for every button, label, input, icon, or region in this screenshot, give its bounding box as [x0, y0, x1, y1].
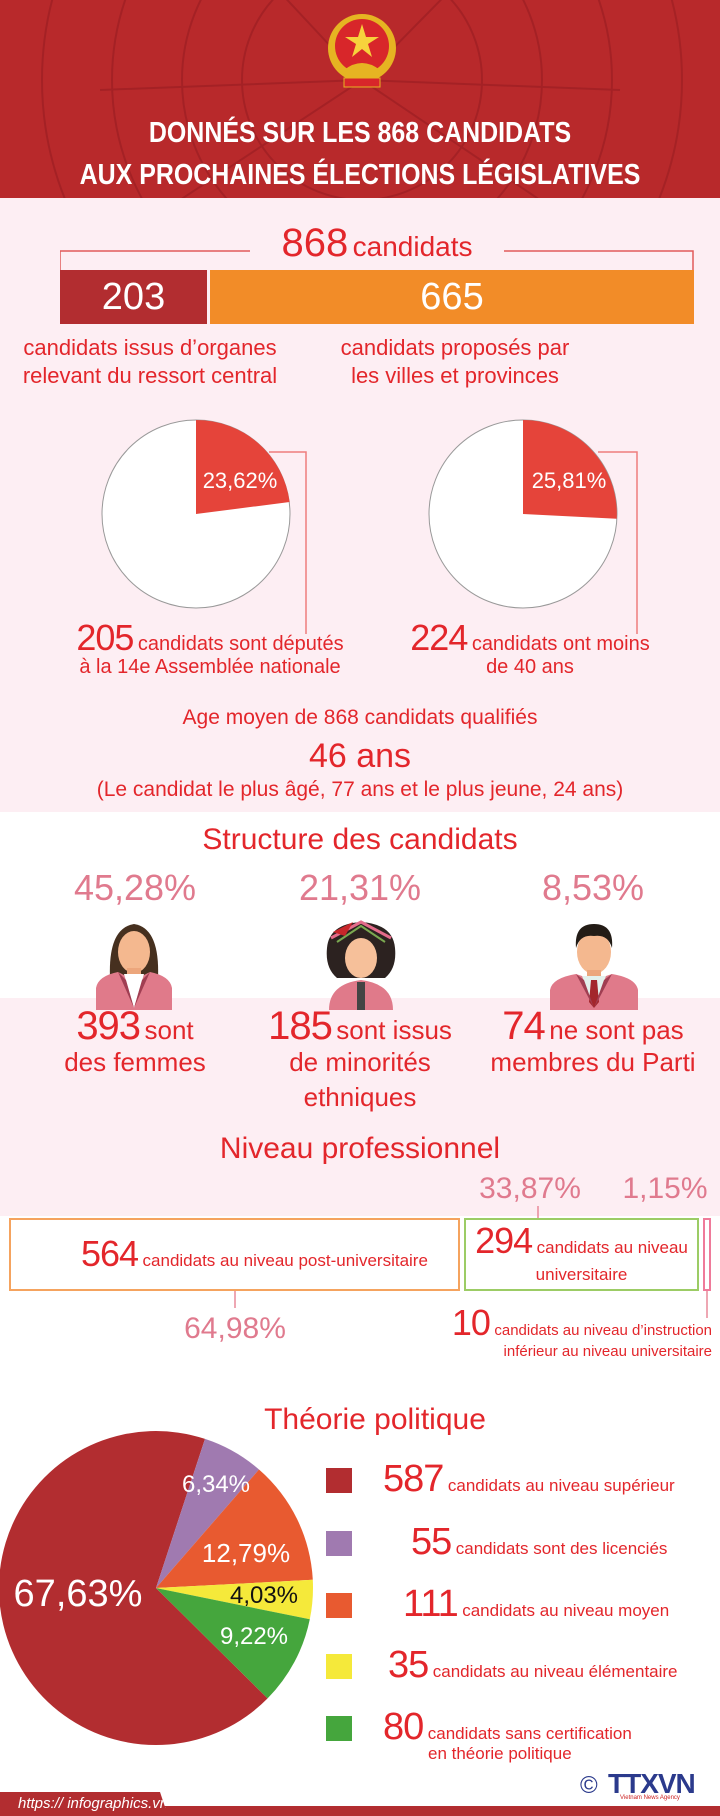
box: university: universitaire	[536, 1265, 627, 1284]
chart: pie deputies	[102, 420, 638, 634]
text: 185 minorities	[268, 1004, 452, 1112]
text: 205 deputies: à la 14e Assemblée nationale	[79, 656, 341, 678]
box: below university	[703, 1218, 711, 1291]
chart: pie deputies: 23,62%	[203, 468, 277, 493]
text: 10 candidates: 10 candidats au niveau d’instruction	[452, 1302, 712, 1343]
stat 33,87%: 33,87%	[479, 1172, 581, 1205]
chart: political theory pie: 67,63%	[14, 1573, 142, 1615]
legend item 55: 55 candidats sont des licenciés	[411, 1521, 667, 1563]
text: central	[23, 335, 277, 388]
text: provinces	[341, 335, 569, 388]
panel: minorities	[268, 867, 452, 1112]
bar: 203: 203	[102, 276, 165, 318]
bracket line	[60, 250, 694, 270]
heading: professional level: Niveau professionnel	[220, 1132, 500, 1165]
text: 205 deputies	[76, 617, 344, 678]
text: 393 women: des femmes	[64, 1047, 206, 1077]
text: 185 minorities: ethniques	[304, 1082, 416, 1112]
heading: structure: Structure des candidats	[202, 823, 518, 856]
logo: TTXVN: ©	[580, 1772, 598, 1799]
panel: totals bar	[60, 221, 694, 324]
text: 10 candidates: inférieur au niveau universitaire	[504, 1343, 712, 1360]
connector lines	[234, 1206, 708, 1318]
heading: 868 candidats: 868 candidats	[281, 221, 473, 265]
title	[80, 116, 640, 191]
text: 224 under 40: de 40 ans	[486, 656, 574, 678]
icon: ethnic minority woman	[326, 920, 396, 1010]
stat 64,98%: 64,98%	[184, 1312, 286, 1345]
text: 224 under 40	[410, 617, 650, 678]
legend item 111: 111 candidats au niveau moyen	[403, 1583, 669, 1625]
chart: political theory pie: 6,34%	[182, 1471, 250, 1498]
icon: man	[550, 924, 638, 1010]
pink background section 2	[0, 998, 720, 1216]
text: 185 minorities: 185 sont issus	[268, 1004, 452, 1048]
text: 393 women: 393 sont	[76, 1004, 194, 1048]
logo: TTXVN: TTXVN	[608, 1768, 695, 1799]
chart: political theory pie	[0, 1431, 313, 1745]
text: provinces: candidats proposés par	[341, 335, 569, 360]
chart: pie deputies: 25,81%	[532, 468, 606, 493]
icon: woman	[96, 924, 172, 1010]
legend item 80: 80 candidats sans certification	[383, 1706, 632, 1748]
title: DONNÉS SUR LES 868 CANDIDATS	[149, 117, 571, 149]
box: university	[464, 1218, 699, 1291]
text: average age: Age moyen de 868 candidats qualifiés	[183, 706, 537, 729]
box: post-university: 564 candidats au niveau post-universitaire	[81, 1233, 428, 1274]
chart: political theory pie: 4,03%	[230, 1582, 298, 1609]
text: central: candidats issus d’organes	[23, 335, 277, 360]
bar: 665	[210, 270, 694, 324]
panel: women	[64, 867, 206, 1077]
logo: TTXVN: Vietnam News Agency	[620, 1795, 680, 1801]
heading: political theory: Théorie politique	[264, 1403, 486, 1436]
footer bar	[0, 1806, 720, 1816]
text: 205 deputies: 205 candidats sont députés	[76, 617, 344, 658]
stat 45,28%: 45,28%	[74, 867, 196, 908]
chart: political theory pie: 12,79%	[202, 1538, 290, 1568]
legend item 35: 35 candidats au niveau élémentaire	[388, 1644, 678, 1686]
bar: 665: 665	[420, 276, 484, 318]
bar: 203	[60, 270, 207, 324]
title: AUX PROCHAINES ÉLECTIONS LÉGISLATIVES	[80, 159, 640, 191]
chart: political theory pie: 9,22%	[220, 1623, 288, 1650]
stat 1,15%: 1,15%	[622, 1172, 708, 1205]
text: 393 women	[64, 1004, 206, 1077]
icon: national emblem	[328, 14, 396, 88]
box: university: 294 candidats au niveau	[475, 1220, 688, 1261]
text: ages range: (Le candidat le plus âgé, 77 ans et le plus jeune, 24 ans)	[97, 778, 623, 801]
box: post-university	[9, 1218, 460, 1291]
text: 224 under 40: 224 candidats ont moins	[410, 617, 650, 658]
legend item 80: en théorie politique	[428, 1744, 572, 1763]
stat 8,53%: 8,53%	[542, 867, 644, 908]
stat 21,31%: 21,31%	[299, 867, 421, 908]
text: 46 ans: 46 ans	[309, 737, 411, 775]
footer url: https:// infographics.vn	[18, 1795, 168, 1812]
legend item 587: 587 candidats au niveau supérieur	[383, 1458, 675, 1500]
header band	[0, 0, 720, 198]
legend item 80	[326, 1706, 632, 1763]
text: central: relevant du ressort central	[23, 363, 277, 388]
legend	[326, 1458, 678, 1763]
text: 185 minorities: de minorités	[289, 1047, 431, 1077]
text: 74 non-party: 74 ne sont pas	[502, 1004, 684, 1048]
text: 74 non-party: membres du Parti	[490, 1047, 696, 1077]
text: 74 non-party	[490, 1004, 696, 1077]
text: provinces: les villes et provinces	[351, 363, 559, 388]
pink background section 1	[0, 198, 720, 812]
panel: non-party	[490, 867, 696, 1077]
